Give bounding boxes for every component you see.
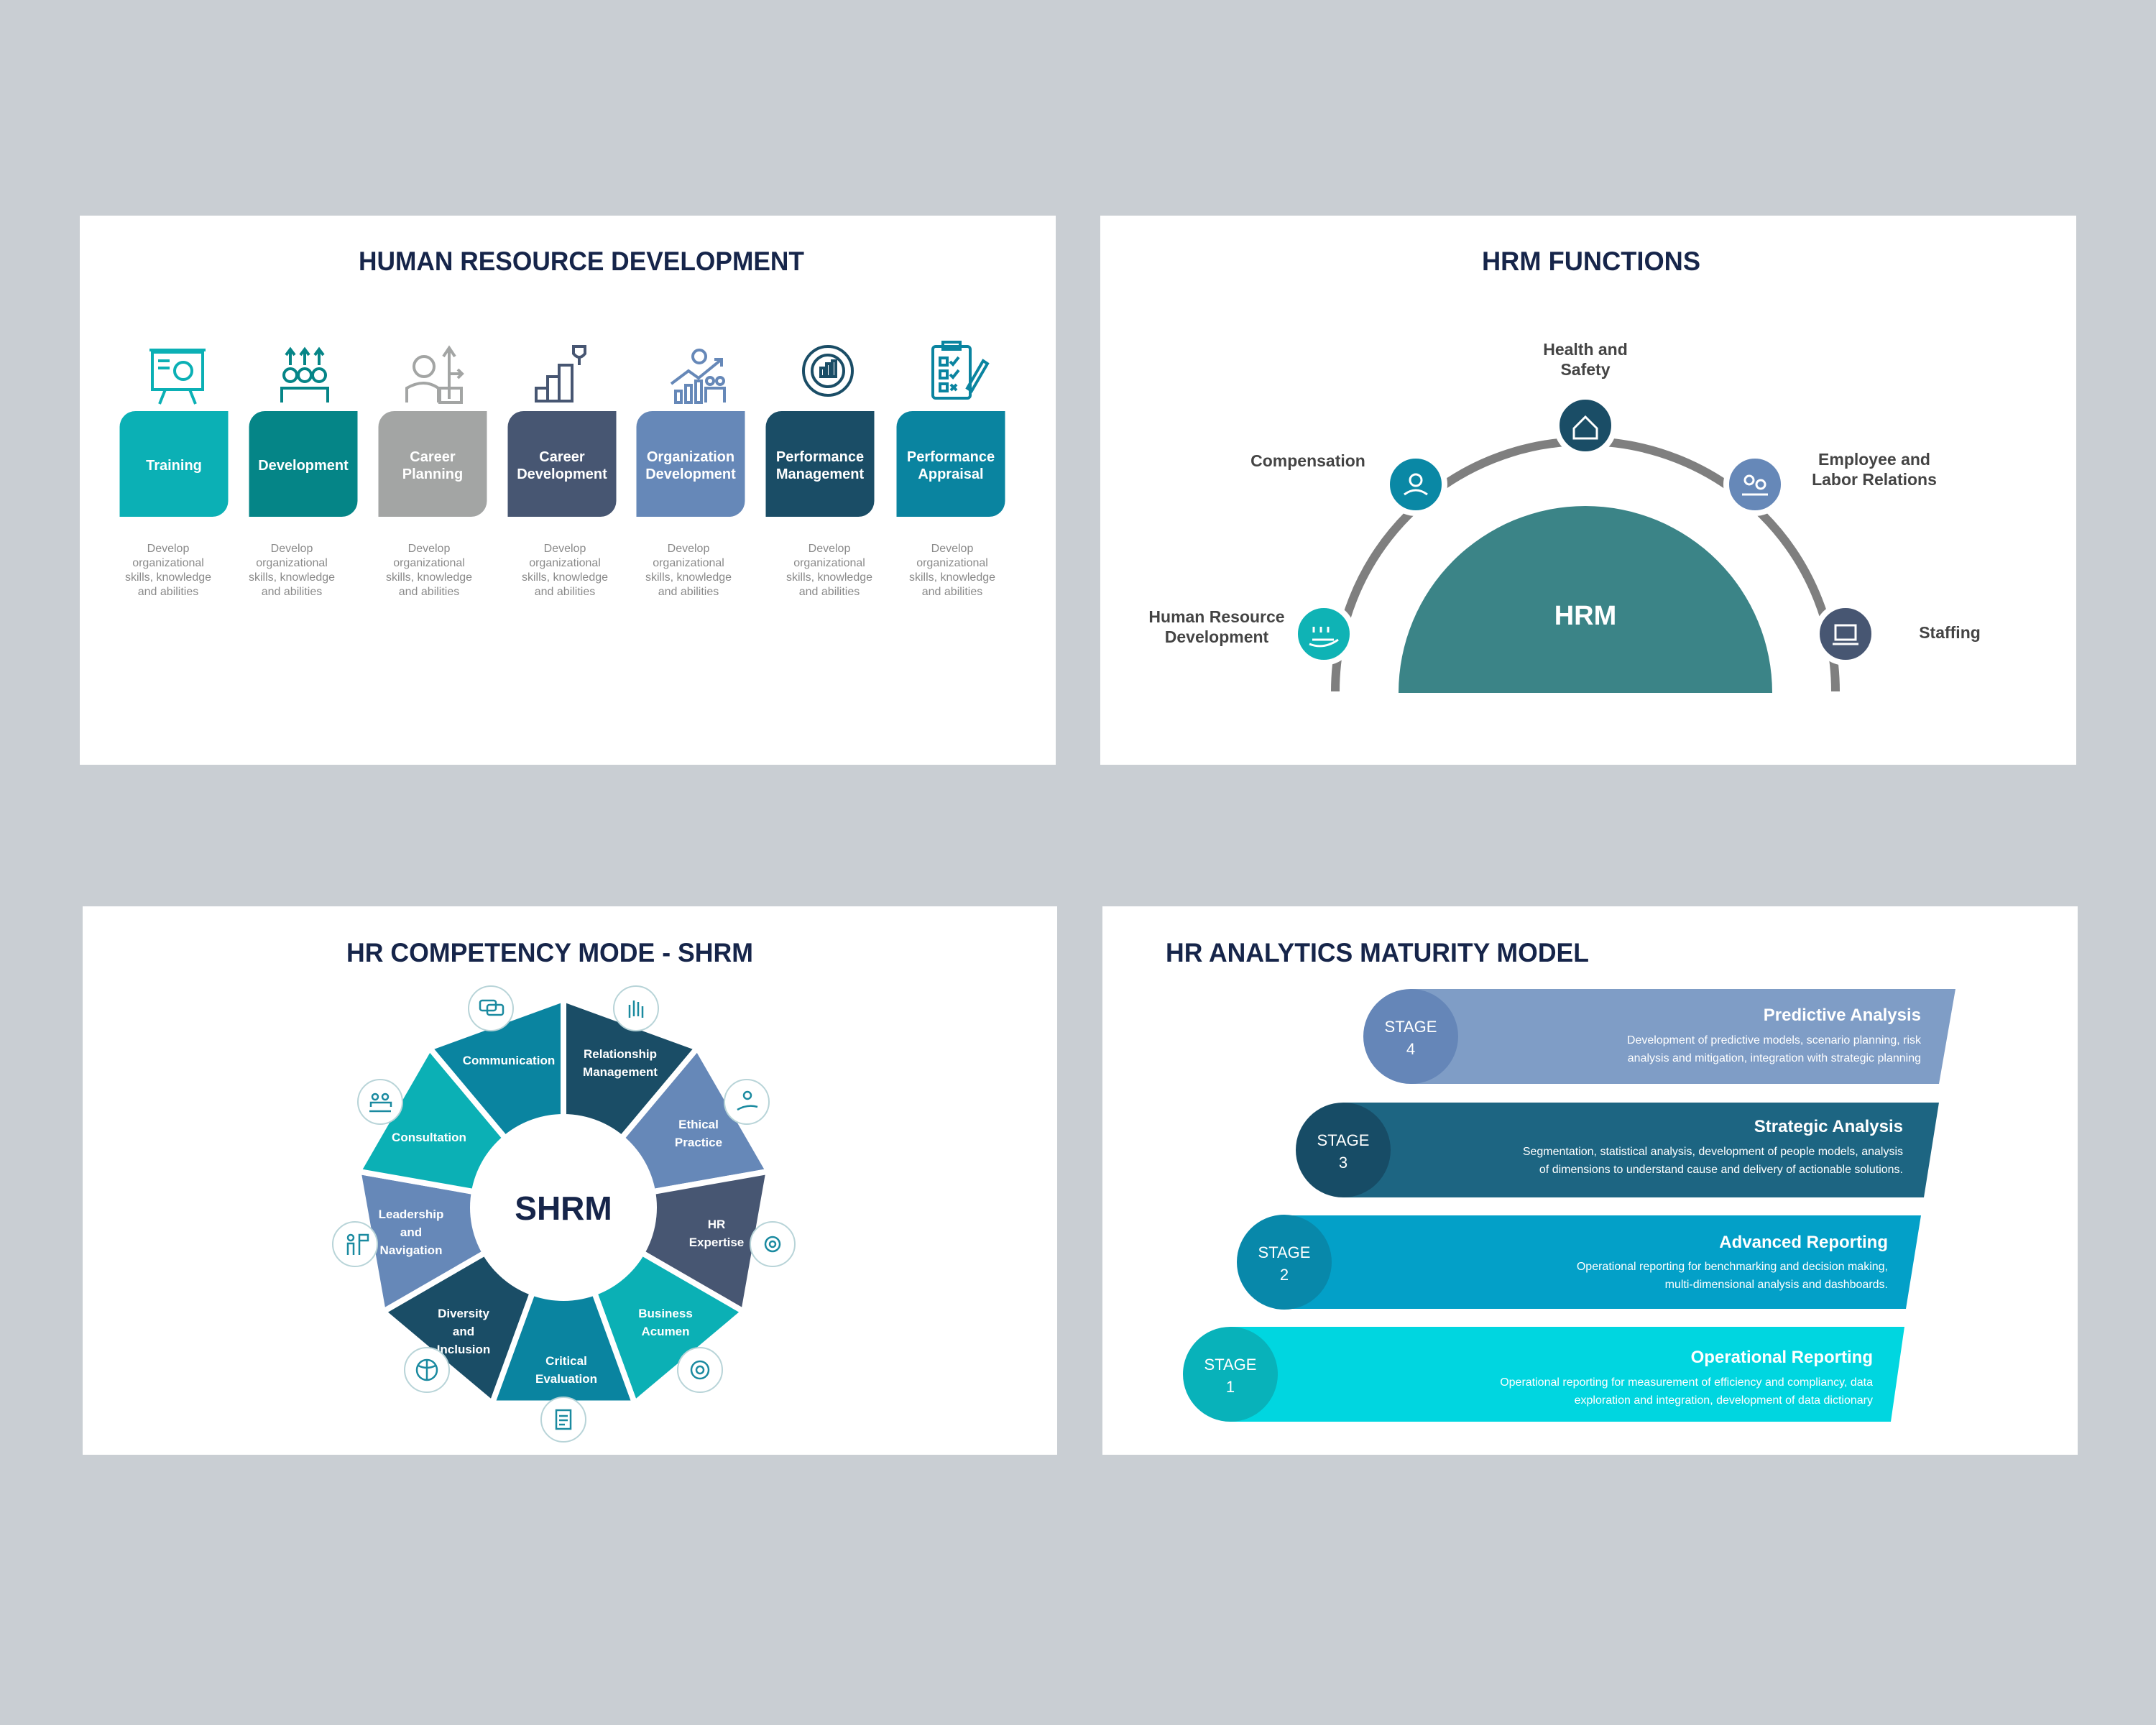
node: employee and labor relations [1726,456,1784,513]
icon: organization growth [671,350,724,402]
card: organization development [637,411,745,517]
card: performance management: Management [776,466,864,482]
card: career planning [378,411,487,517]
descriptions: skills, knowledge [522,571,608,584]
descriptions: Develop [931,543,973,555]
card: organization development: Organization [647,449,734,465]
segment labels: Navigation [380,1243,442,1257]
descriptions: organizational [132,557,204,569]
dome: HRM [1399,506,1772,693]
card: performance management: Performance [776,449,864,465]
descriptions: and abilities [138,586,198,598]
card: performance appraisal: Appraisal [918,466,984,482]
descriptions: organizational [916,557,988,569]
stage 4: 4 [1406,1040,1415,1058]
stage 4: STAGE [1385,1018,1437,1036]
segment labels: Business [638,1307,693,1320]
segment labels: Acumen [641,1325,690,1338]
segment labels: and [400,1225,422,1239]
stage 4: analysis and mitigation, integration with strategic planning [1628,1052,1921,1064]
stage 1: Operational reporting for measurement of efficiency and compliancy, data [1500,1376,1873,1389]
card: training: Training [146,458,202,474]
stage 1: Operational Reporting [1691,1348,1873,1367]
descriptions: and abilities [262,586,322,598]
descriptions: and abilities [399,586,459,598]
panel: hrm functions [1100,216,2076,765]
icon: career planning person [407,348,462,402]
card: career development [507,411,617,517]
descriptions: and abilities [799,586,860,598]
card: development [249,411,358,517]
stage 1 [1183,1327,1904,1422]
segment labels: HR [708,1218,725,1231]
descriptions: Develop [668,543,709,555]
labels: Labor Relations [1812,470,1937,489]
stage 3: Segmentation, statistical analysis, development of people models, analysis [1523,1146,1903,1158]
descriptions: Develop [271,543,313,555]
card: career planning: Planning [402,466,463,482]
node: health and safety [1557,397,1614,454]
stage 3 [1296,1103,1939,1197]
descriptions: Develop [808,543,850,555]
title: human resource development: HUMAN RESOURCE DEVELOPMENT [359,247,804,276]
card: career planning: Career [410,449,456,465]
stage 4: Predictive Analysis [1764,1006,1921,1025]
descriptions: skills, knowledge [386,571,472,584]
segment labels: Evaluation [535,1372,597,1386]
segment labels: and [453,1325,474,1338]
stage 2: Advanced Reporting [1719,1233,1888,1252]
stage 2: STAGE [1258,1243,1310,1261]
title: hr competency mode: HR COMPETENCY MODE - SHRM [346,938,753,967]
card: development: Development [258,458,349,474]
stage 3: 3 [1339,1154,1348,1172]
panel: hr competency model [83,906,1057,1455]
descriptions: Develop [147,543,189,555]
segment labels: Expertise [689,1236,744,1249]
wheel [358,999,769,1403]
segment labels: Critical [545,1354,587,1368]
stage 4 [1363,989,1955,1084]
stage 3: Strategic Analysis [1754,1117,1903,1136]
labels: Health and [1543,340,1628,359]
stage 1: STAGE [1204,1356,1256,1374]
title: hrm functions: HRM FUNCTIONS [1482,247,1700,276]
descriptions: Develop [408,543,450,555]
title: hr analytics maturity model: HR ANALYTICS MATURITY MODEL [1166,938,1589,967]
arc [1335,441,1835,691]
stage 3: STAGE [1317,1131,1369,1149]
descriptions: skills, knowledge [909,571,995,584]
segment labels: Consultation [392,1131,466,1144]
descriptions: skills, knowledge [249,571,335,584]
card: career development: Development [517,466,607,482]
stage 1: 1 [1226,1378,1235,1396]
card: performance appraisal [897,411,1005,517]
descriptions: skills, knowledge [645,571,732,584]
stage 2: Operational reporting for benchmarking and decision making, [1577,1261,1888,1273]
labels: Staffing [1919,623,1981,642]
card: career development: Career [539,449,585,465]
stage 4: Development of predictive models, scenario planning, risk [1627,1034,1922,1046]
labels: Development [1165,627,1269,646]
center label: SHRM: SHRM [515,1190,612,1227]
descriptions: organizational [793,557,865,569]
node: staffing [1817,605,1874,663]
panel: hr analytics maturity model [1102,906,2078,1455]
stage 3: of dimensions to understand cause and delivery of actionable solutions. [1539,1164,1903,1176]
descriptions: skills, knowledge [125,571,211,584]
icon: training board [149,350,206,404]
dome: HRM: HRM [1554,601,1616,631]
segment labels: Relationship [584,1047,657,1061]
panel: human resource development [80,216,1056,765]
stage 2: multi-dimensional analysis and dashboards. [1665,1279,1888,1291]
node: human resource development [1295,605,1353,663]
icon glyphs [348,1000,780,1429]
card: performance appraisal: Performance [907,449,995,465]
card: performance management [766,411,874,517]
labels: Employee and [1818,450,1930,469]
segment labels: Diversity [438,1307,489,1320]
labels: Compensation [1250,451,1365,470]
segment labels: Communication [463,1054,555,1067]
descriptions: skills, knowledge [786,571,872,584]
stage 2: 2 [1280,1266,1289,1284]
segment labels: Inclusion [437,1343,490,1356]
icon: performance gear cycle [803,346,852,395]
descriptions: and abilities [922,586,982,598]
segment labels: Practice [675,1136,722,1149]
segment labels: Ethical [678,1118,719,1131]
icon: appraisal clipboard [933,342,987,398]
labels [1148,340,1981,646]
labels: Human Resource [1148,607,1285,626]
card: training [119,411,229,517]
descriptions: organizational [256,557,328,569]
segment labels: Leadership [379,1208,443,1221]
icon circles [333,986,795,1442]
segment labels [379,1047,744,1386]
node: compensation [1387,456,1445,513]
segment labels: Management [583,1065,658,1079]
labels: Safety [1560,360,1611,379]
descriptions [125,543,995,598]
descriptions: and abilities [658,586,719,598]
descriptions: Develop [544,543,586,555]
descriptions: organizational [529,557,601,569]
descriptions: organizational [653,557,724,569]
descriptions: and abilities [535,586,595,598]
icon: development team [282,349,328,402]
descriptions: organizational [393,557,465,569]
card: organization development: Development [645,466,736,482]
stage 2 [1237,1215,1921,1310]
icon: trophy steps [536,346,585,401]
stage 1: exploration and integration, development of data dictionary [1575,1394,1873,1407]
